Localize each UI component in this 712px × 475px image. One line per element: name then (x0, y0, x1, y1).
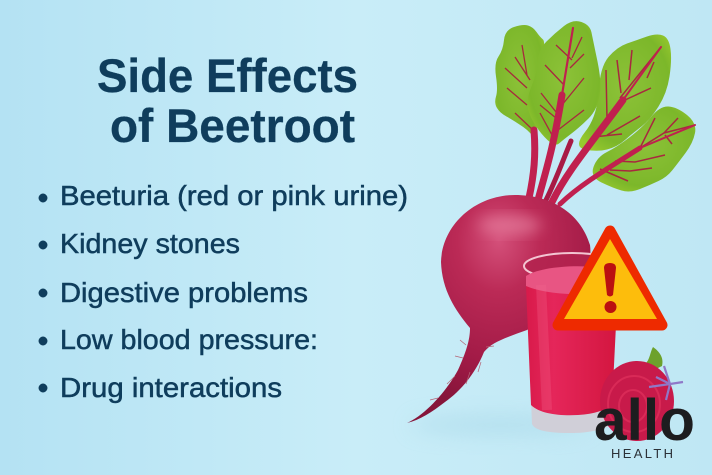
logo subtitle: HEALTH (611, 446, 673, 461)
logo accent (649, 366, 683, 400)
title (97, 49, 358, 152)
illustration: glass of beet juice (524, 253, 620, 433)
leaf: back left (495, 25, 544, 142)
title: Side Effects (97, 49, 358, 102)
icon: warning triangle (558, 231, 662, 325)
illustration: beetroot leaves (495, 21, 695, 204)
item: kidney stones: Kidney stones (60, 228, 240, 259)
item: beeturia: Beeturia (red or pink urine) (60, 180, 408, 211)
glass rim interior (524, 253, 620, 279)
illustration: beetroot body (407, 195, 590, 423)
list: side effects (39, 180, 408, 403)
illustration: sliced beet (600, 347, 674, 441)
leaf: centre front (527, 21, 600, 145)
stem: centre (538, 28, 573, 200)
exclamation mark (604, 263, 616, 313)
stem: back left (529, 130, 535, 198)
juice surface (526, 266, 620, 294)
item: drug interactions: Drug interactions (60, 372, 282, 403)
juice shadow (410, 415, 590, 435)
glass base (531, 395, 616, 433)
juice (526, 285, 618, 415)
leaf: lower right (593, 106, 695, 191)
logo: allo health (594, 366, 695, 461)
item: low blood pressure: Low blood pressure: (60, 324, 318, 355)
title: of Beetroot (110, 99, 355, 152)
leaf: back right (579, 34, 671, 151)
item: digestive problems: Digestive problems (60, 277, 308, 308)
logo wordmark: allo (594, 388, 695, 453)
stems: centre and right (546, 47, 695, 204)
